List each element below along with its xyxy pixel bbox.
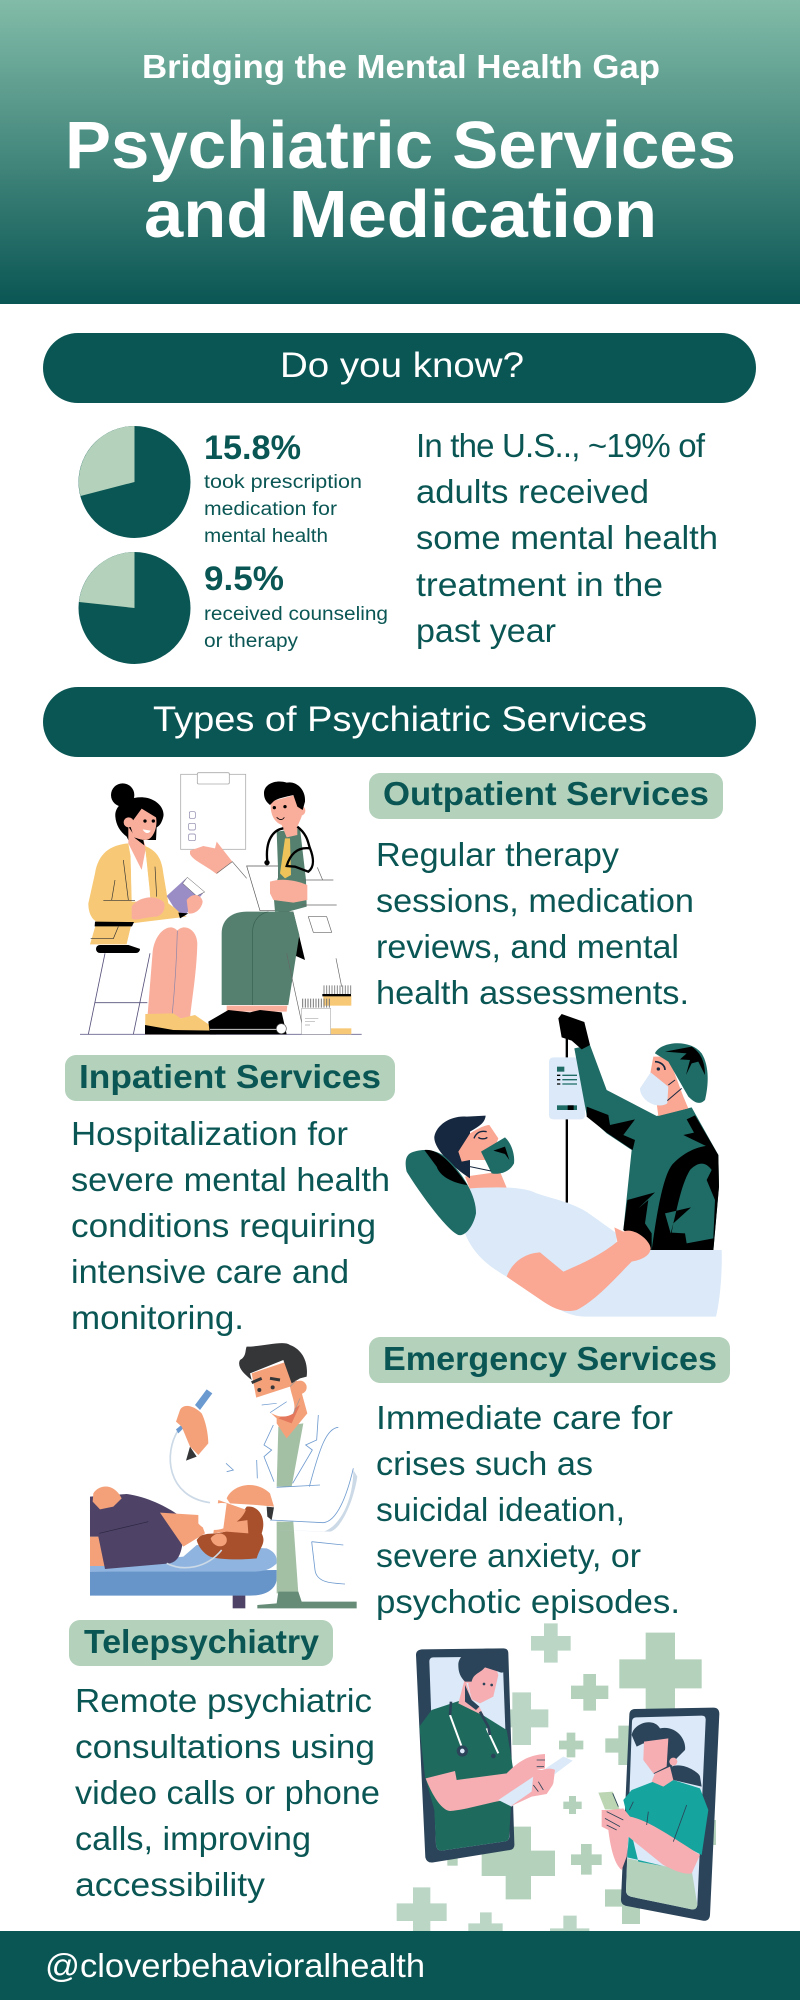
heading pill: do you know [43,333,756,403]
text block: outpatient description: reviews, and mental [376,928,679,965]
stool [88,945,150,1034]
text block: U.S. statistic: adults received [416,473,649,510]
illustration: telepsychiatry video call [397,1623,719,1932]
text block: emergency description: suicidal ideation, [376,1491,625,1528]
text block: U.S. statistic [416,427,718,649]
illustration: emergency care [90,1343,357,1608]
title: and Medication [144,177,657,252]
pie chart: 15.8% [78,426,190,538]
patient [88,783,216,1034]
text block: telepsychiatry description: Remote psychiatric [75,1682,372,1719]
label: emergency services: Emergency Services [383,1340,717,1377]
illustration: inpatient care [406,1014,722,1317]
pie chart: 9.5% [78,552,190,664]
label: inpatient services: Inpatient Services [79,1058,381,1095]
illustration: outpatient consultation [80,773,362,1034]
patient lying [90,1486,263,1569]
text block: telepsychiatry description: accessibility [75,1866,266,1903]
heading pill: types of services [43,687,756,757]
footer bar [0,1931,800,2000]
text block: outpatient description: health assessments. [376,974,689,1011]
text block: telepsychiatry description: consultations using [75,1728,375,1765]
text block: outpatient description: sessions, medication [376,882,694,919]
left phone with doctor [416,1648,573,1862]
label: telepsychiatry: Telepsychiatry [84,1623,320,1660]
title: Psychiatric Services [65,108,736,183]
bed [90,1545,277,1608]
text block: U.S. statistic: treatment in the [416,566,663,603]
text block: telepsychiatry description [75,1682,380,1903]
stat: 9.5%: 9.5% [204,560,284,598]
stat: 15.8%: mental health [204,526,328,547]
text block: emergency description [376,1399,680,1620]
label: telepsychiatry [69,1620,333,1666]
stat: 15.8%: medication for [204,499,338,520]
text block: outpatient description: Regular therapy [376,836,620,873]
stat: 15.8% [204,429,362,547]
text block: U.S. statistic: some mental health [416,519,718,556]
heading pill: do you know: Do you know? [280,346,524,385]
medicine jars [302,985,351,1034]
text block: inpatient description: Hospitalization for [71,1115,348,1152]
heading pill: types of services: Types of Psychiatric Services [153,700,647,739]
header banner [0,0,800,304]
text block: inpatient description: conditions requiring [71,1207,376,1244]
doctor [170,1343,357,1608]
subtitle: Bridging the Mental Health Gap [142,48,660,85]
text block: outpatient description [376,836,694,1011]
background crosses [397,1623,716,1932]
stat: 15.8%: took prescription [204,472,362,493]
stat: 9.5%: or therapy [204,631,299,652]
text block: emergency description: psychotic episodes. [376,1583,680,1620]
text block: U.S. statistic: past year [416,612,556,649]
stat: 9.5% [204,560,388,652]
doctor [190,782,342,1034]
text block: telepsychiatry description: calls, improving [75,1820,311,1857]
iv bag [549,1057,585,1119]
stat: 15.8%: 15.8% [204,429,301,467]
text block: emergency description: crises such as [376,1445,593,1482]
text block: inpatient description [71,1115,390,1336]
label: inpatient services [65,1055,395,1101]
text block: telepsychiatry description: video calls or phone [75,1774,380,1811]
text block: inpatient description: severe mental health [71,1161,390,1198]
nurse [558,1014,719,1251]
stat: 9.5%: received counseling [204,604,388,625]
footer bar: @cloverbehavioralhealth [45,1947,425,1984]
text block: emergency description: severe anxiety, or [376,1537,641,1574]
text block: U.S. statistic: In the U.S.., ~19% of [416,427,706,464]
text block: emergency description: Immediate care for [376,1399,673,1436]
label: outpatient services: Outpatient Services [383,775,709,812]
right phone with patient [598,1708,719,1921]
text block: inpatient description: monitoring. [71,1299,244,1336]
text block: inpatient description: intensive care and [71,1253,349,1290]
patient [406,1116,722,1317]
title [65,108,736,252]
